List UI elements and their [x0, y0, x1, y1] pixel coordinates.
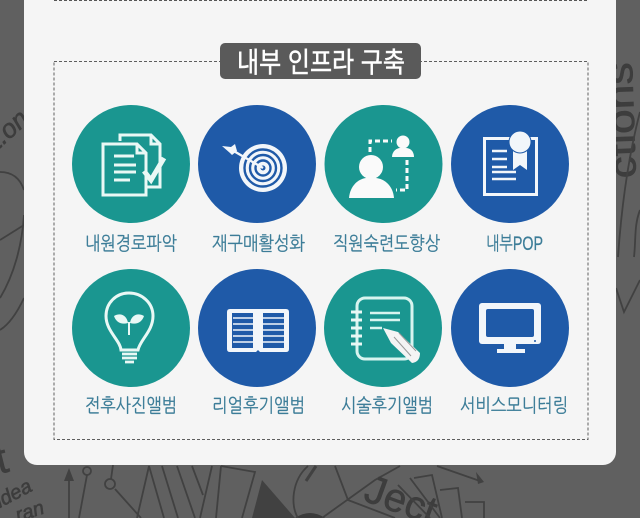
item: staff skill: [324, 105, 442, 255]
label: 전후사진앨범: [85, 396, 177, 417]
label: 직원숙련도향상: [333, 234, 440, 255]
icon: certificate: [484, 131, 536, 194]
label: 내원경로파악: [85, 234, 177, 255]
label: 내부POP: [486, 234, 543, 255]
icon: monitor: [479, 303, 541, 353]
item: internal POP: [451, 105, 569, 255]
icon: notebook with pencil: [351, 298, 420, 363]
top dashed divider: [54, 0, 588, 2]
heading: internal infrastructure: 내부 인프라 구축: [237, 47, 405, 78]
icon: light bulb with sprout: [106, 293, 153, 362]
dashed frame: [54, 62, 588, 440]
icon: open book: [227, 309, 289, 352]
item: visit path: [72, 105, 190, 255]
item: before and after album: [72, 269, 190, 417]
label: 재구매활성화: [212, 234, 305, 255]
label: 서비스모니터링: [460, 396, 568, 417]
item: rebooking: [198, 105, 316, 255]
label: 리얼후기앨범: [212, 396, 305, 417]
icon: documents with check: [103, 135, 164, 195]
label: 시술후기앨범: [341, 396, 433, 417]
item: treatment review album: [324, 269, 442, 417]
item: real review album: [198, 269, 316, 417]
icon: target with arrow: [222, 144, 287, 192]
icon: people with dashed connector: [349, 136, 414, 198]
item: service monitoring: [451, 269, 569, 417]
